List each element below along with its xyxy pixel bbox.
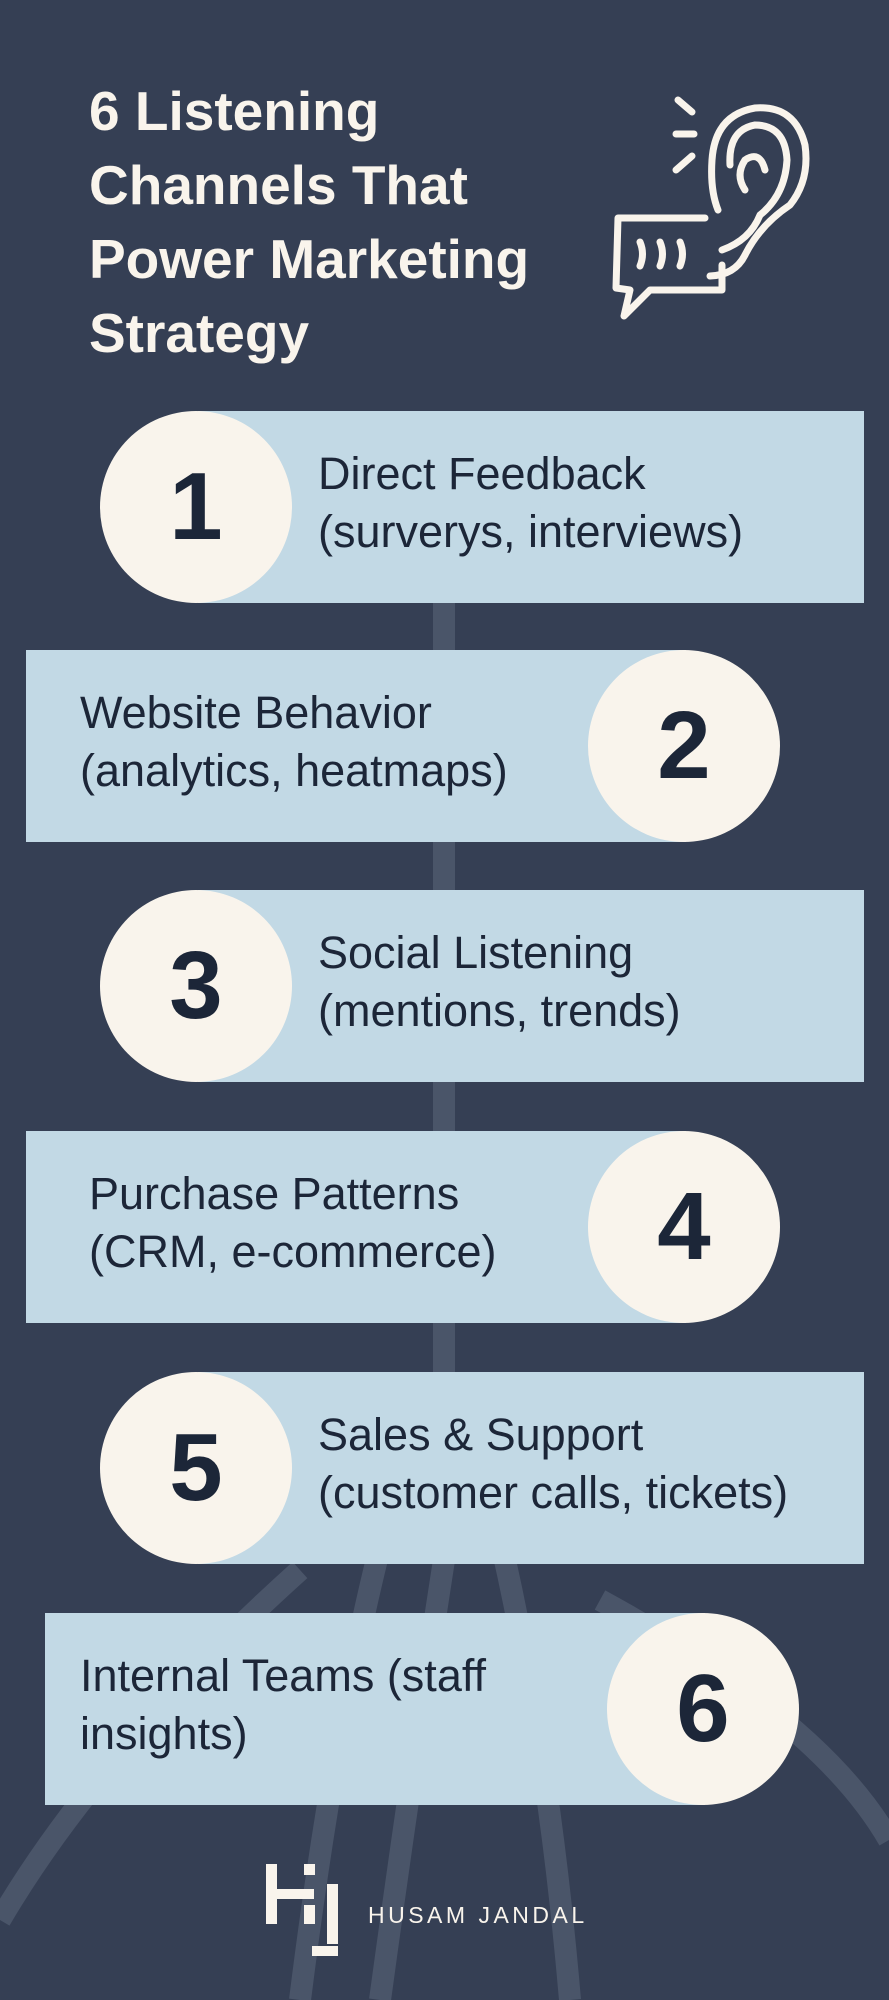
text 5 xyxy=(318,1409,788,1518)
panel: 4 purchase patterns xyxy=(26,1131,780,1323)
text 6: insights) xyxy=(80,1708,248,1759)
number 2: 2 xyxy=(657,692,711,799)
text 4: Purchase Patterns xyxy=(89,1168,459,1219)
panel: 1 direct feedback xyxy=(100,411,864,603)
text 2 xyxy=(80,687,508,796)
title: 6 Listening xyxy=(89,80,379,142)
text 6 xyxy=(80,1650,486,1759)
text 4: (CRM, e-commerce) xyxy=(89,1226,497,1277)
title: Power Marketing xyxy=(89,228,529,290)
number 3: 3 xyxy=(169,932,223,1039)
title: Strategy xyxy=(89,302,309,364)
number 2 xyxy=(588,650,780,842)
number 6: 6 xyxy=(676,1655,730,1762)
text 5: Sales & Support xyxy=(318,1409,643,1460)
number 3 xyxy=(100,890,292,1082)
text 1: Direct Feedback xyxy=(318,448,646,499)
number 6 xyxy=(607,1613,799,1805)
panel: 6 internal teams xyxy=(45,1613,799,1805)
text 3 xyxy=(318,927,681,1036)
logo xyxy=(266,1864,588,1956)
text 6: Internal Teams (staff xyxy=(80,1650,486,1701)
number 4 xyxy=(588,1131,780,1323)
title xyxy=(89,80,529,364)
text 4 xyxy=(89,1168,497,1277)
number 5 xyxy=(100,1372,292,1564)
icon: ear with speech bubble xyxy=(612,96,810,320)
text 2: Website Behavior xyxy=(80,687,432,738)
text 1: (surverys, interviews) xyxy=(318,506,743,557)
text 2: (analytics, heatmaps) xyxy=(80,745,508,796)
number 4: 4 xyxy=(657,1173,711,1280)
panel: 5 sales & support xyxy=(100,1372,864,1564)
number 1: 1 xyxy=(169,453,223,560)
text 3: Social Listening xyxy=(318,927,633,978)
text 5: (customer calls, tickets) xyxy=(318,1467,788,1518)
logo text: HUSAM JANDAL xyxy=(368,1902,588,1928)
icon: HJ mark xyxy=(266,1864,338,1956)
text 1 xyxy=(318,448,743,557)
title: Channels That xyxy=(89,154,468,216)
number 1 xyxy=(100,411,292,603)
text 3: (mentions, trends) xyxy=(318,985,681,1036)
number 5: 5 xyxy=(169,1414,223,1521)
panel: 2 website behavior xyxy=(26,650,780,842)
panel: 3 social listening xyxy=(100,890,864,1082)
